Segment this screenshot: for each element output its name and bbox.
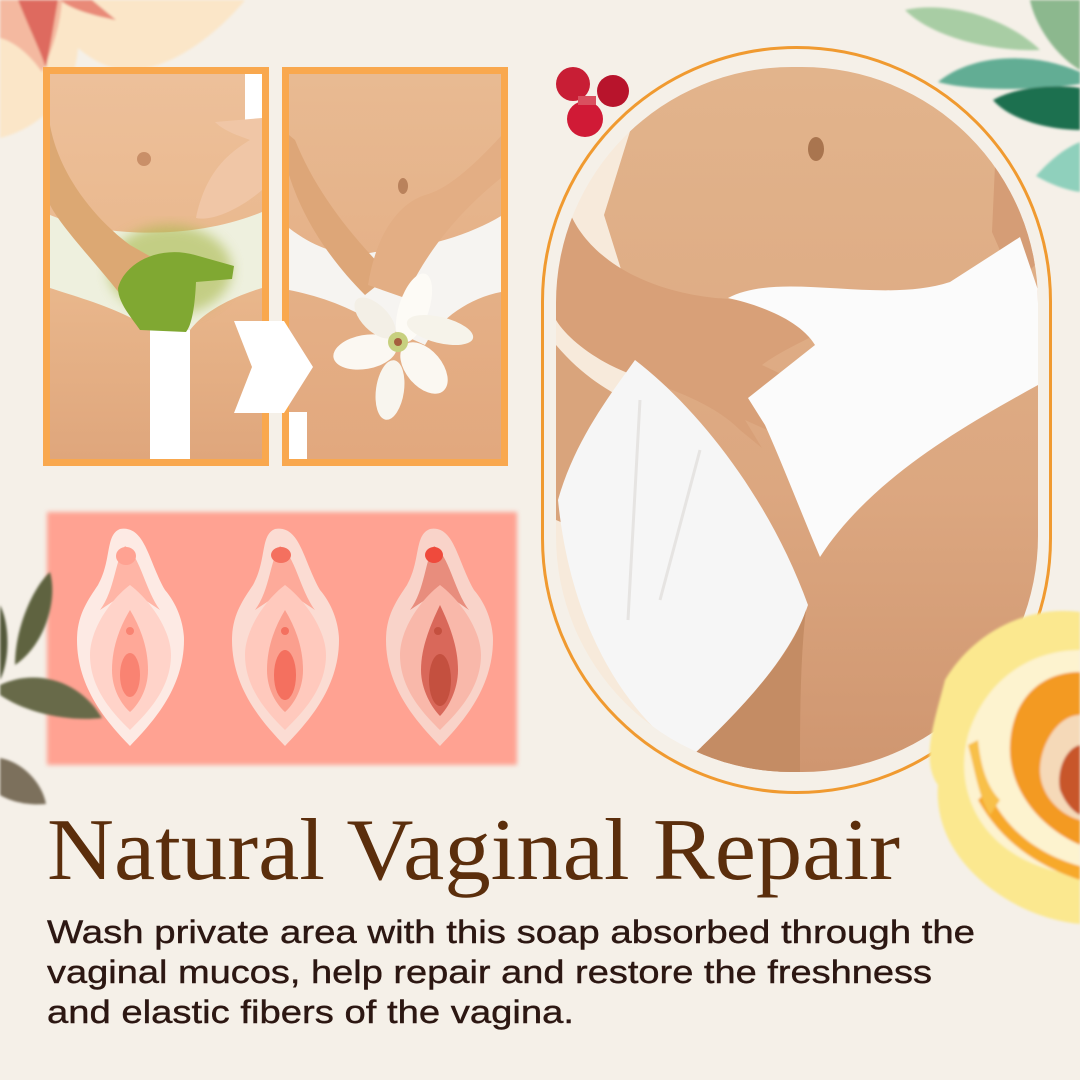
decoration: top-left peach flower [0, 0, 245, 138]
right arm and hand [368, 136, 501, 298]
photo panel: arch [556, 67, 1038, 772]
forearm and hand [556, 218, 810, 446]
upper hand [196, 118, 262, 219]
green hand [118, 252, 234, 332]
white background gaps [245, 74, 262, 122]
body text: and elastic fibers of the vagina. [47, 994, 574, 1030]
green tint [108, 225, 232, 315]
diagram 3 [386, 529, 493, 746]
panel: pink diagrams [47, 512, 517, 765]
diagram 2 [232, 529, 339, 746]
body text: vaginal mucos, help repair and restore the freshness [47, 954, 932, 990]
navel [398, 178, 408, 194]
right hand [992, 168, 1035, 269]
body text: Wash private area with this soap absorbed through the [47, 914, 975, 950]
frame [46, 70, 266, 462]
towel upper fold [728, 237, 1038, 557]
navel [137, 152, 151, 166]
thigh shadow [690, 610, 806, 772]
white underwear [289, 216, 501, 345]
arrow [234, 321, 313, 413]
towel drape [558, 360, 808, 758]
lace underwear [50, 212, 262, 330]
body text [47, 914, 975, 1030]
decoration: top-right leaves [905, 0, 1080, 192]
decoration: red berries [556, 67, 629, 137]
arch frame [542, 48, 1050, 792]
left hip [556, 345, 612, 522]
white backdrop right [1000, 67, 1038, 267]
arm [50, 126, 150, 292]
photo panel: before [46, 70, 266, 462]
navel [808, 137, 824, 161]
left arm [289, 135, 375, 295]
icon: lily flower [331, 269, 476, 422]
diagram 1 [77, 529, 184, 746]
photo panel: after [286, 70, 504, 462]
decoration: left leaves [0, 572, 102, 804]
title: Natural Vaginal Repair [47, 802, 900, 899]
frame [286, 70, 504, 462]
decoration: yellow rose [930, 611, 1080, 924]
torso [604, 67, 1038, 772]
